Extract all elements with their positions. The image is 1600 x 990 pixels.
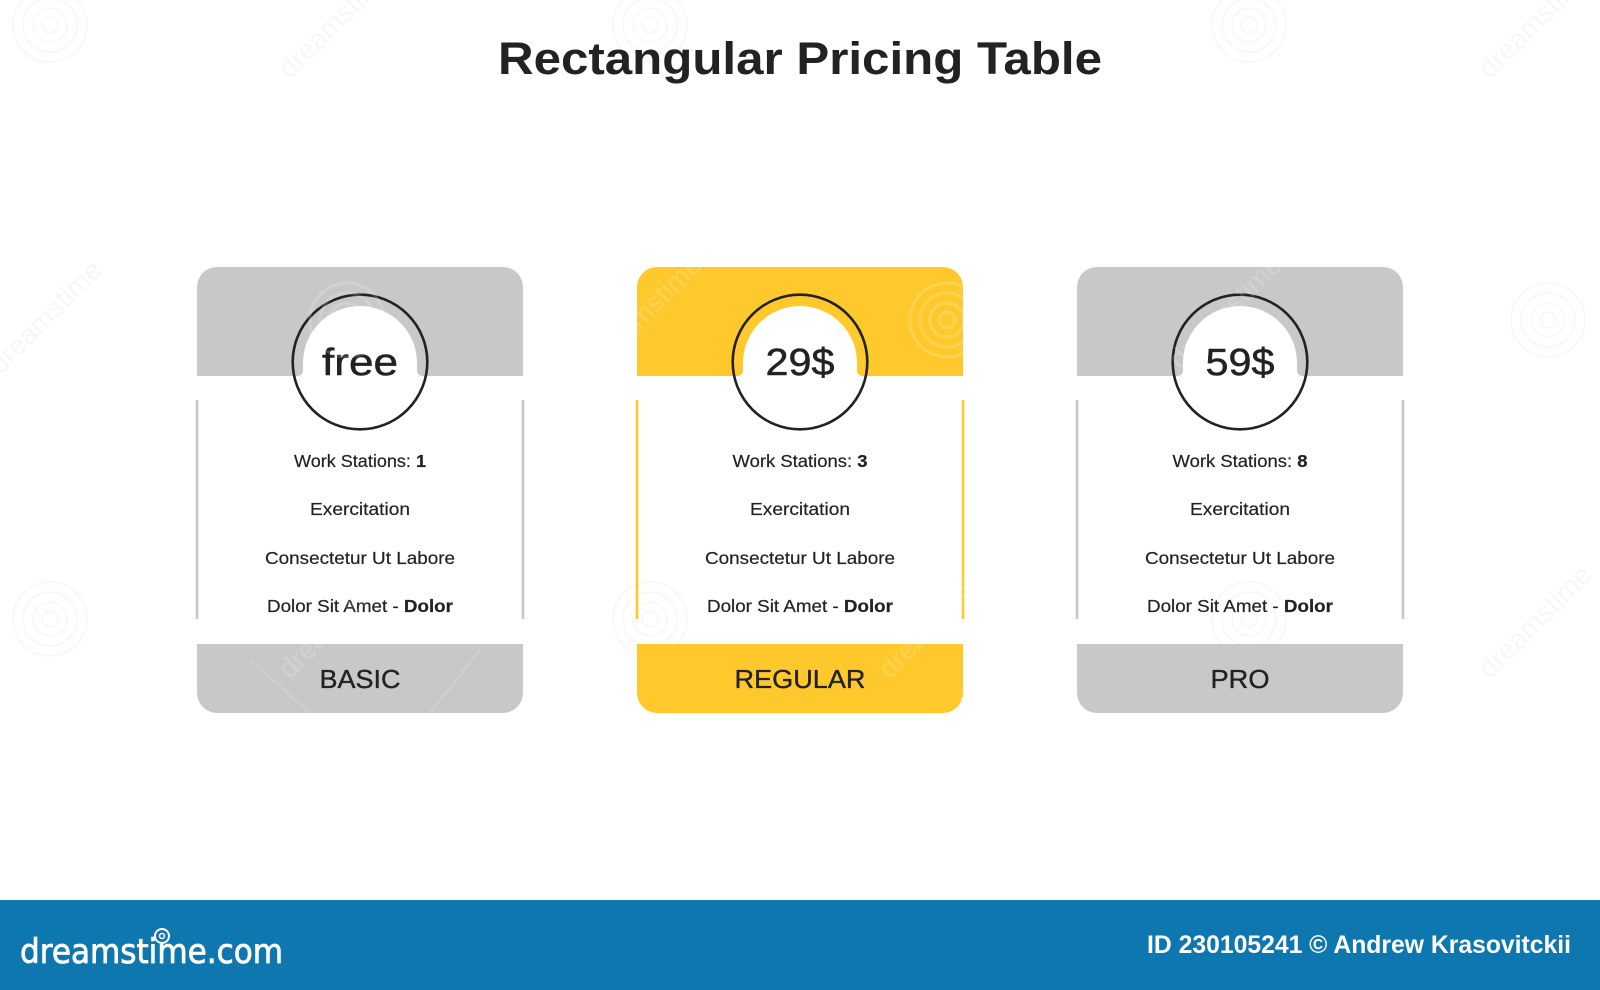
feature list: basic: Consectetur Ut Labore xyxy=(265,548,455,568)
text: dreamstime xyxy=(1162,249,1288,374)
price badge: free xyxy=(293,295,427,429)
feature list: pro xyxy=(1145,451,1335,616)
card header: regular xyxy=(637,267,963,376)
price badge: 59$: 59$ xyxy=(1206,342,1274,384)
card header: pro xyxy=(1077,267,1403,376)
price badge: free: free xyxy=(322,342,398,384)
feature list: regular: Consectetur Ut Labore xyxy=(705,548,895,568)
panel: pro plan xyxy=(1076,267,1404,713)
plan footer: basic xyxy=(197,644,523,713)
text: dreamstime xyxy=(1472,559,1598,684)
text: dreamstime xyxy=(872,559,998,684)
feature list: basic xyxy=(265,451,455,616)
plan footer: pro xyxy=(1077,644,1403,713)
text: dreamstime xyxy=(582,249,708,374)
feature list: basic: Exercitation xyxy=(310,499,410,519)
feature list: pro: Dolor Sit Amet - Dolor xyxy=(1147,596,1333,616)
feature list: basic: Dolor Sit Amet - Dolor xyxy=(267,596,453,616)
price badge: 29$ xyxy=(733,295,867,429)
plan footer: regular xyxy=(637,644,963,713)
plan footer: basic: BASIC xyxy=(320,664,400,694)
feature list: regular: Work Stations: 3 xyxy=(732,451,868,471)
feature list: regular: Dolor Sit Amet - Dolor xyxy=(707,596,893,616)
credit line: ID 230105241 © Andrew Krasovitckii xyxy=(1147,931,1571,959)
feature list: regular: Exercitation xyxy=(750,499,850,519)
price badge: 29$: 29$ xyxy=(766,342,834,384)
feature list: pro: Exercitation xyxy=(1190,499,1290,519)
card header: basic xyxy=(197,267,523,376)
footer band xyxy=(0,900,1600,990)
logo: dreamstime: dreamstime.com xyxy=(20,932,283,972)
panel: basic plan xyxy=(196,267,524,713)
panel: regular plan xyxy=(636,267,964,713)
side rules: pro xyxy=(1076,400,1404,619)
feature list: pro: Consectetur Ut Labore xyxy=(1145,548,1335,568)
side rules: regular xyxy=(636,400,964,619)
plan footer: pro: PRO xyxy=(1210,664,1270,694)
plan footer: regular: REGULAR xyxy=(734,664,866,694)
price badge: 59$ xyxy=(1173,295,1307,429)
text: dreamstime xyxy=(272,559,398,684)
feature list: basic: Work Stations: 1 xyxy=(294,451,426,471)
title: Rectangular Pricing Table xyxy=(498,33,1102,84)
side rules: basic xyxy=(196,400,524,619)
feature list: regular xyxy=(705,451,895,616)
feature list: pro: Work Stations: 8 xyxy=(1172,451,1308,471)
